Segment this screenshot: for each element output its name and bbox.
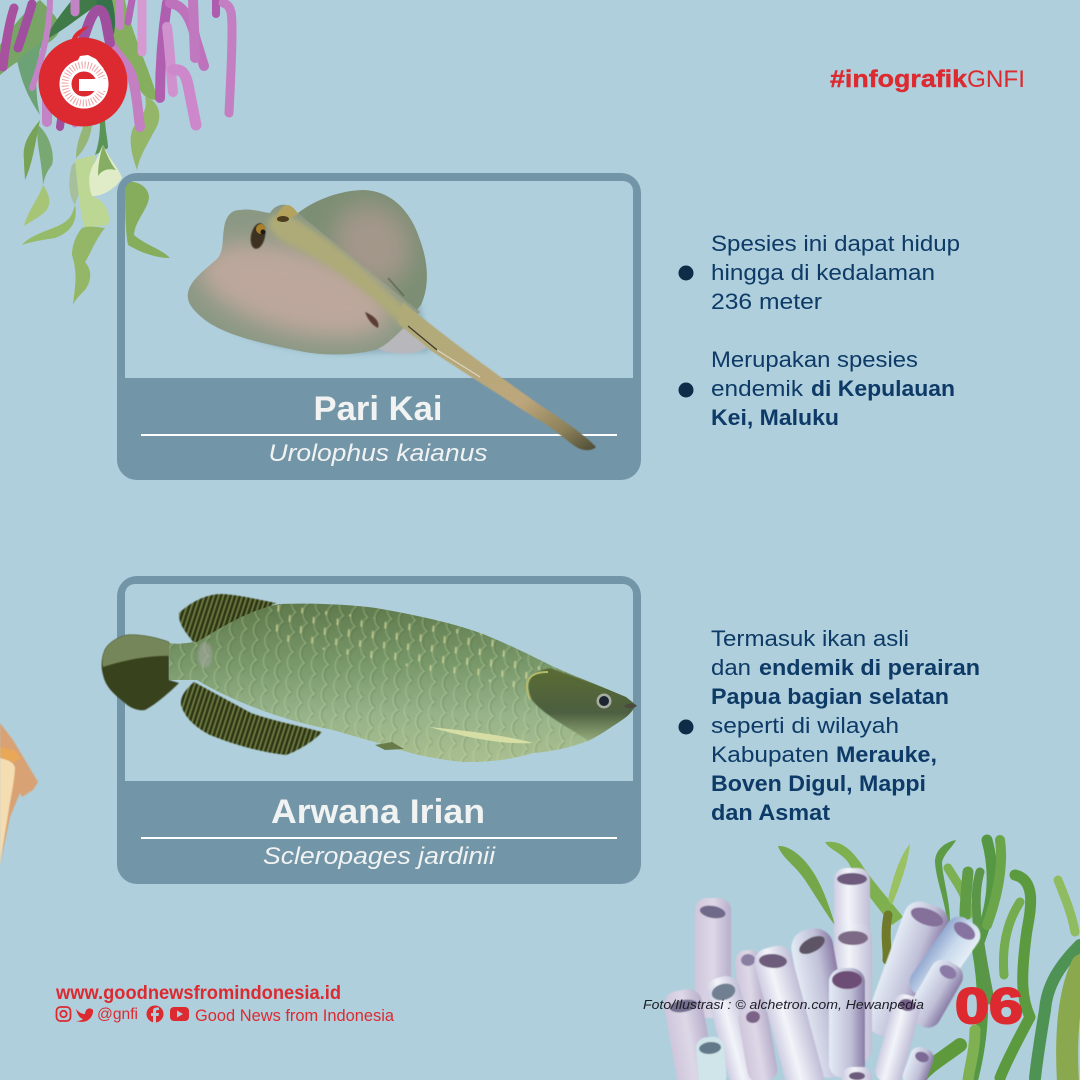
fact: depth: 236 meter [711,289,822,314]
divider line [141,434,617,436]
icon: youtube [170,1007,189,1021]
fact: distribution: dan Asmat [711,800,831,825]
species name: Arwana Irian [271,793,485,831]
divider line [141,837,617,839]
fact: endemic: Kei, Maluku [711,405,839,430]
fact: depth [711,231,960,314]
fact: distribution: Papua bagian selatan [711,684,949,709]
plant: top-left hanging seaweed [0,0,232,305]
panel: Arwana Irian card [117,576,641,884]
bullet [678,382,694,398]
dorsal fin [179,594,276,643]
right wing [298,190,427,312]
letter G bar [79,79,107,91]
species name: Pari Kai [314,390,442,428]
fact: endemic [711,347,955,430]
photo credit: Foto/Ilustrasi : © alchetron.com, Hewanpedia [643,997,924,1012]
hashtag: #infografik [830,66,968,93]
text: Pari Kai facts [678,231,960,430]
fact: endemic: Merupakan spesies [711,347,918,372]
logo: GNFI red badge [38,26,128,126]
fact: distribution: Boven Digul, Mappi [711,771,926,796]
footer: website and social media [55,983,395,1025]
tail [398,302,596,450]
fact: distribution: dan [711,655,751,680]
icon: twitter [76,1008,93,1022]
icon: instagram [56,1007,70,1021]
icon: leaf shell on left edge [0,723,38,865]
page number: 06 [955,978,1023,1034]
tail fin [102,635,179,710]
pectoral fin [429,727,533,743]
handle: @gnfi [97,1006,138,1023]
fact: distribution: endemik di perairan [759,655,980,680]
icon: facebook [146,1006,164,1023]
fact: distribution: Merauke, [836,742,937,767]
illustration: tube coral [662,868,985,1080]
fact: distribution: Kabupaten [711,742,829,767]
bullet [678,720,694,734]
fact: depth: hingga di kedalaman [711,260,935,285]
illustration: arowana fish [102,594,640,770]
hashtag [830,66,1025,93]
ring [66,66,102,102]
main disc [188,205,420,354]
scientific name: Scleropages jardinii [263,843,496,870]
page name: Good News from Indonesia [195,1006,395,1025]
illustration: stingray [188,189,596,450]
fact: distribution: Termasuk ikan asli [711,626,909,651]
fact: distribution [711,626,980,825]
anal fin [181,682,322,755]
fact: distribution: seperti di wilayah [711,713,899,738]
plant: seaweed bottom-right [778,840,1080,1080]
text: Arwana Irian facts [678,626,980,825]
bullet [678,266,694,280]
scientific name: Urolophus kaianus [268,440,488,467]
eagle head [78,55,104,69]
website: www.goodnewsfromindonesia.id [55,983,341,1004]
eye [596,694,612,708]
body [169,604,636,762]
fact: depth: Spesies ini dapat hidup [711,231,960,256]
eyes [248,222,268,250]
pelvic fin [378,329,428,353]
fact: endemic: endemik [711,376,804,401]
fact: endemic: di Kepulauan [811,376,955,401]
hashtag: GNFI [967,66,1025,93]
panel: Pari Kai card [117,173,641,480]
